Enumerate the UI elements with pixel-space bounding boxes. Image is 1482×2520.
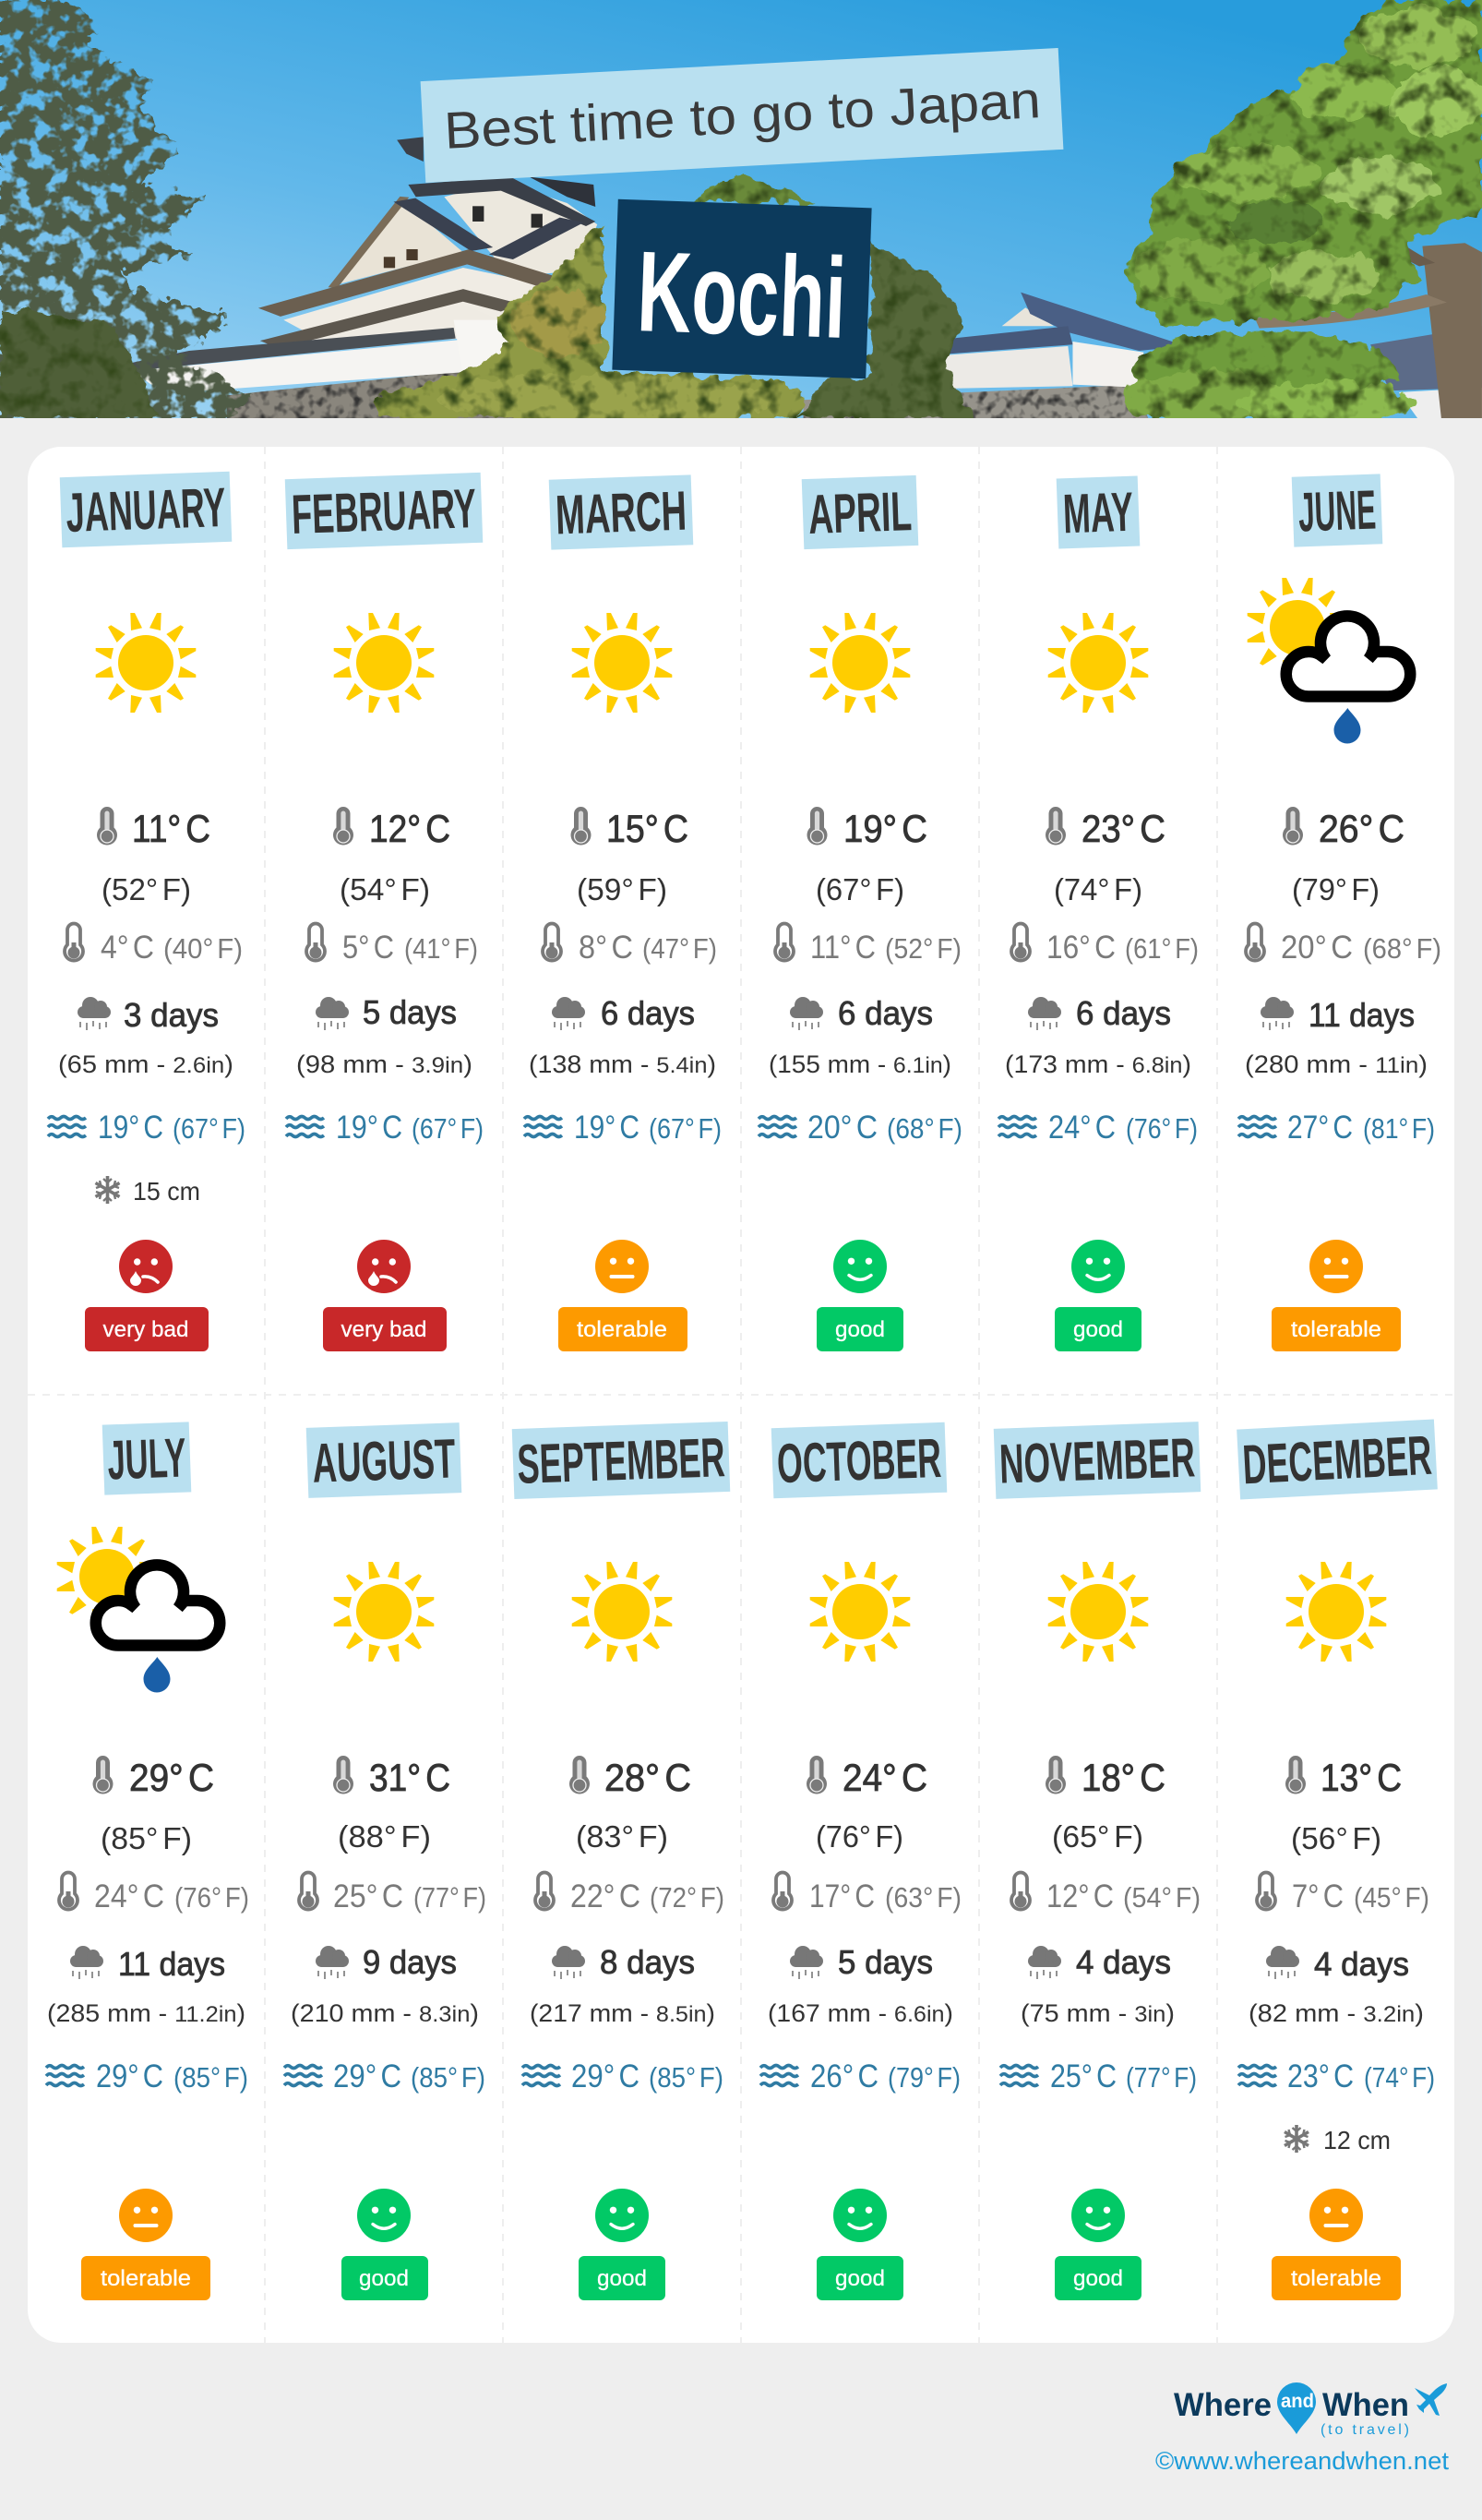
panel: October — [760, 1422, 962, 2300]
low temperature: 5° C — [342, 930, 394, 966]
panel: July — [46, 1422, 249, 2300]
low temperature: 20° C — [1281, 930, 1353, 966]
high temperature: (59° F) — [577, 872, 667, 906]
icon: sun, cloud and rain — [1248, 578, 1410, 744]
high temperature: (76° F) — [816, 1819, 903, 1854]
rating — [1272, 2189, 1401, 2300]
panel: December — [1237, 1419, 1438, 2300]
low temperature — [1257, 1872, 1429, 1914]
sea temperature: (68° F) — [887, 1112, 962, 1145]
rating: good — [835, 2266, 885, 2291]
high temperature: 13° C — [1321, 1756, 1402, 1799]
panel: June — [1238, 474, 1441, 1351]
panel: March — [524, 474, 722, 1351]
rating — [817, 2189, 903, 2300]
sea temperature: 20° C — [807, 1110, 878, 1146]
sea temperature — [998, 1110, 1198, 1146]
rainfall: (217 mm - 8.5in) — [530, 1999, 715, 2027]
panel: September — [512, 1422, 730, 2300]
high temperature — [1285, 1756, 1402, 1855]
low temperature: 16° C — [1046, 930, 1116, 966]
rainfall: 4 days — [1314, 1945, 1409, 1983]
rainfall: 6 days — [1076, 994, 1171, 1032]
rating — [1055, 1240, 1141, 1351]
low temperature: (54° F) — [1123, 1881, 1201, 1914]
icon: sun — [572, 613, 672, 713]
icon: sun — [810, 1562, 910, 1662]
rating: very bad — [341, 1317, 426, 1342]
snowfall — [96, 1176, 200, 1206]
rainfall — [58, 996, 233, 1078]
rainfall: 6 days — [601, 994, 695, 1032]
rainfall — [1005, 994, 1191, 1078]
logo: Where and When: (to travel) — [1321, 2422, 1409, 2438]
high temperature: 24° C — [843, 1756, 927, 1799]
month label — [802, 475, 918, 549]
high temperature — [807, 1756, 927, 1854]
logo: Where and When: Where — [1174, 2387, 1272, 2423]
high temperature — [570, 807, 688, 906]
high temperature: 18° C — [1082, 1756, 1165, 1799]
low temperature — [306, 923, 478, 966]
high temperature: (56° F) — [1291, 1821, 1381, 1855]
low temperature: (47° F) — [642, 932, 717, 965]
rainfall: (210 mm - 8.3in) — [291, 1999, 479, 2027]
icon: sun — [96, 613, 196, 713]
high temperature: 26° C — [1319, 807, 1404, 850]
header photo: Kochi castle and pine trees — [0, 0, 1482, 425]
rating: very bad — [103, 1317, 188, 1342]
rating — [579, 2189, 665, 2300]
low temperature — [1246, 923, 1441, 966]
rating: tolerable — [101, 2266, 191, 2291]
rainfall — [47, 1945, 245, 2027]
high temperature — [1046, 807, 1165, 906]
panel: monthly weather card — [28, 447, 1454, 2343]
panel: August — [284, 1422, 486, 2300]
month label — [60, 472, 232, 547]
month label: JANUARY — [65, 476, 227, 544]
sea temperature: 27° C — [1287, 1110, 1353, 1146]
high temperature: (83° F) — [576, 1819, 668, 1854]
month label — [306, 1422, 461, 1498]
rainfall — [769, 994, 951, 1078]
month label — [549, 474, 693, 550]
month label: MAY — [1062, 481, 1134, 545]
month label — [994, 1422, 1201, 1499]
low temperature — [773, 1872, 962, 1914]
icon: sun — [572, 1562, 672, 1662]
low temperature — [543, 923, 717, 966]
high temperature — [92, 1756, 214, 1855]
low temperature: (45° F) — [1354, 1881, 1429, 1914]
sea temperature — [522, 2058, 723, 2094]
low temperature: 12° C — [1046, 1878, 1114, 1914]
sea temperature: 25° C — [1050, 2058, 1117, 2094]
low temperature: 25° C — [333, 1878, 403, 1914]
rainfall: 5 days — [838, 1943, 933, 1981]
icon: airplane — [1415, 2383, 1447, 2416]
high temperature: (54° F) — [340, 872, 430, 906]
sea temperature: (81° F) — [1363, 1112, 1435, 1145]
website credit: ©www.whereandwhen.net — [1155, 2447, 1449, 2475]
icon: map pin — [1277, 2382, 1316, 2434]
rating — [85, 1240, 209, 1351]
rainfall: (167 mm - 6.6in) — [768, 1999, 953, 2027]
low temperature: 4° C — [101, 930, 154, 966]
high temperature: 12° C — [369, 807, 450, 850]
sea temperature — [1000, 2058, 1197, 2094]
high temperature — [333, 1756, 450, 1854]
snowfall: 12 cm — [1323, 2126, 1391, 2154]
low temperature: 22° C — [570, 1878, 640, 1914]
high temperature — [1283, 807, 1404, 906]
rainfall — [530, 1943, 715, 2027]
low temperature: (77° F) — [413, 1881, 486, 1914]
low temperature — [1011, 1872, 1201, 1914]
rating: good — [359, 2266, 409, 2291]
high temperature — [333, 807, 450, 906]
month label: JUNE — [1297, 479, 1377, 543]
rainfall — [1249, 1945, 1424, 2027]
rainfall: 4 days — [1076, 1943, 1171, 1981]
low temperature — [775, 923, 962, 966]
rating: tolerable — [1291, 2266, 1381, 2291]
rating — [817, 1240, 903, 1351]
high temperature: 23° C — [1082, 807, 1165, 850]
low temperature: (63° F) — [885, 1881, 962, 1914]
rainfall: 6 days — [838, 994, 933, 1032]
low temperature: 7° C — [1292, 1878, 1344, 1914]
sea temperature — [46, 2058, 248, 2094]
high temperature: (88° F) — [338, 1819, 431, 1854]
rainfall: (280 mm - 11in) — [1245, 1050, 1428, 1078]
low temperature — [299, 1872, 486, 1914]
high temperature: (65° F) — [1052, 1819, 1143, 1854]
rainfall: 11 days — [1309, 996, 1415, 1034]
sea temperature: (85° F) — [173, 2061, 248, 2094]
rainfall: 3 days — [124, 996, 219, 1034]
icon: sun — [1048, 1562, 1148, 1662]
logo: Where and When: and — [1281, 2391, 1314, 2412]
low temperature: 17° C — [809, 1878, 875, 1914]
sea temperature — [1238, 2058, 1435, 2094]
icon: sun — [1048, 613, 1148, 713]
logo: Where and When — [1174, 2382, 1447, 2438]
panel: February — [285, 473, 484, 1351]
sea temperature: (85° F) — [411, 2061, 485, 2094]
title banner — [421, 48, 1063, 183]
month label: SEPTEMBER — [516, 1426, 726, 1495]
sea temperature: 19° C — [574, 1110, 639, 1146]
low temperature — [1011, 923, 1199, 966]
low temperature: (61° F) — [1125, 932, 1199, 965]
rainfall: (285 mm - 11.2in) — [47, 1999, 245, 2027]
rainfall: 5 days — [363, 993, 457, 1031]
low temperature: (76° F) — [174, 1881, 249, 1914]
rainfall: (173 mm - 6.8in) — [1005, 1050, 1191, 1078]
low temperature — [535, 1872, 724, 1914]
rainfall: 11 days — [118, 1945, 225, 1983]
panel: April — [759, 475, 962, 1351]
sea temperature: (67° F) — [412, 1112, 484, 1145]
rainfall: (138 mm - 5.4in) — [529, 1050, 716, 1078]
snowfall: 15 cm — [133, 1177, 200, 1206]
sea temperature: 23° C — [1287, 2058, 1354, 2094]
city name banner: Kochi — [635, 228, 848, 363]
month label — [1292, 474, 1382, 547]
month label: OCTOBER — [776, 1427, 942, 1494]
high temperature: 19° C — [843, 807, 927, 850]
icon: sun — [810, 613, 910, 713]
rainfall — [1245, 996, 1428, 1078]
sea temperature — [759, 1110, 962, 1146]
rating: good — [1073, 2266, 1123, 2291]
sea temperature: (74° F) — [1364, 2061, 1435, 2094]
high temperature — [569, 1756, 691, 1854]
panel: May — [998, 475, 1199, 1351]
rating: tolerable — [1291, 1317, 1381, 1342]
sea temperature — [48, 1110, 245, 1146]
panel: January — [48, 472, 245, 1351]
panel: November — [994, 1422, 1201, 2300]
sea temperature — [760, 2058, 961, 2094]
rating — [341, 2189, 428, 2300]
rainfall: (98 mm - 3.9in) — [296, 1050, 472, 1078]
icon: sun — [334, 1562, 434, 1662]
sea temperature: 19° C — [336, 1110, 402, 1146]
month label: NOVEMBER — [998, 1426, 1196, 1495]
high temperature — [97, 807, 210, 906]
sea temperature: 26° C — [810, 2058, 878, 2094]
month label — [1057, 475, 1140, 549]
low temperature: (41° F) — [404, 932, 478, 965]
logo: Where and When: When — [1322, 2387, 1409, 2423]
low temperature: (40° F) — [163, 932, 243, 965]
rainfall — [1021, 1943, 1175, 2027]
sea temperature: 19° C — [98, 1110, 163, 1146]
rainfall: (65 mm - 2.6in) — [58, 1050, 233, 1078]
low temperature — [59, 1872, 249, 1914]
month label: JULY — [106, 1427, 187, 1491]
low temperature: (52° F) — [885, 932, 962, 965]
rating — [81, 2189, 210, 2300]
rainfall: (75 mm - 3in) — [1021, 1999, 1175, 2027]
sea temperature: (67° F) — [649, 1112, 722, 1145]
sea temperature: 29° C — [96, 2058, 163, 2094]
rainfall: (82 mm - 3.2in) — [1249, 1999, 1424, 2027]
high temperature: 28° C — [604, 1756, 691, 1799]
sea temperature — [286, 1110, 484, 1146]
rating — [1272, 1240, 1401, 1351]
sea temperature: 29° C — [333, 2058, 401, 2094]
sea temperature: (79° F) — [888, 2061, 961, 2094]
sea temperature: (76° F) — [1126, 1112, 1198, 1145]
rainfall — [768, 1943, 953, 2027]
month label — [512, 1422, 730, 1499]
icon: sun — [334, 613, 434, 713]
icon: sun, cloud and rain — [57, 1527, 220, 1693]
month label — [771, 1422, 947, 1498]
sea temperature: (85° F) — [649, 2061, 723, 2094]
sea temperature — [524, 1110, 722, 1146]
rating: good — [597, 2266, 647, 2291]
low temperature: 8° C — [579, 930, 633, 966]
rainfall: 9 days — [363, 1943, 457, 1981]
high temperature: 15° C — [606, 807, 688, 850]
low temperature: (68° F) — [1363, 932, 1441, 965]
high temperature: (67° F) — [816, 872, 904, 906]
sea temperature — [284, 2058, 485, 2094]
high temperature — [1046, 1756, 1165, 1854]
month label: AUGUST — [311, 1427, 457, 1494]
title banner: Best time to go to Japan — [443, 70, 1042, 160]
low temperature: (72° F) — [650, 1881, 724, 1914]
month label — [102, 1422, 191, 1495]
high temperature: (79° F) — [1292, 872, 1380, 906]
month label: APRIL — [807, 480, 913, 546]
rainfall — [291, 1943, 479, 2027]
high temperature: 29° C — [129, 1756, 214, 1799]
high temperature: (52° F) — [102, 872, 191, 906]
high temperature — [807, 807, 927, 906]
rainfall — [296, 993, 472, 1078]
low temperature — [65, 923, 243, 966]
sea temperature — [1238, 1110, 1435, 1146]
rainfall: 8 days — [600, 1943, 695, 1981]
rainfall: (155 mm - 6.1in) — [769, 1050, 951, 1078]
high temperature: (74° F) — [1054, 872, 1142, 906]
sea temperature: (67° F) — [173, 1112, 245, 1145]
low temperature: 24° C — [94, 1878, 164, 1914]
high temperature: 11° C — [132, 807, 210, 850]
month label — [285, 473, 483, 549]
rating: good — [1073, 1317, 1123, 1342]
icon: sun — [1286, 1562, 1386, 1662]
month label: FEBRUARY — [291, 477, 477, 546]
snowfall — [1285, 2125, 1391, 2154]
rating — [1055, 2189, 1141, 2300]
rating — [323, 1240, 447, 1351]
rating: tolerable — [577, 1317, 667, 1342]
low temperature: 11° C — [810, 930, 876, 966]
high temperature: (85° F) — [101, 1821, 192, 1855]
rating: good — [835, 1317, 885, 1342]
sea temperature: 24° C — [1048, 1110, 1116, 1146]
high temperature: 31° C — [369, 1756, 450, 1799]
sea temperature: 29° C — [571, 2058, 639, 2094]
sea temperature: (77° F) — [1126, 2061, 1197, 2094]
rainfall — [529, 994, 716, 1078]
city name banner — [612, 199, 872, 378]
month label: MARCH — [555, 480, 687, 546]
rating — [558, 1240, 687, 1351]
